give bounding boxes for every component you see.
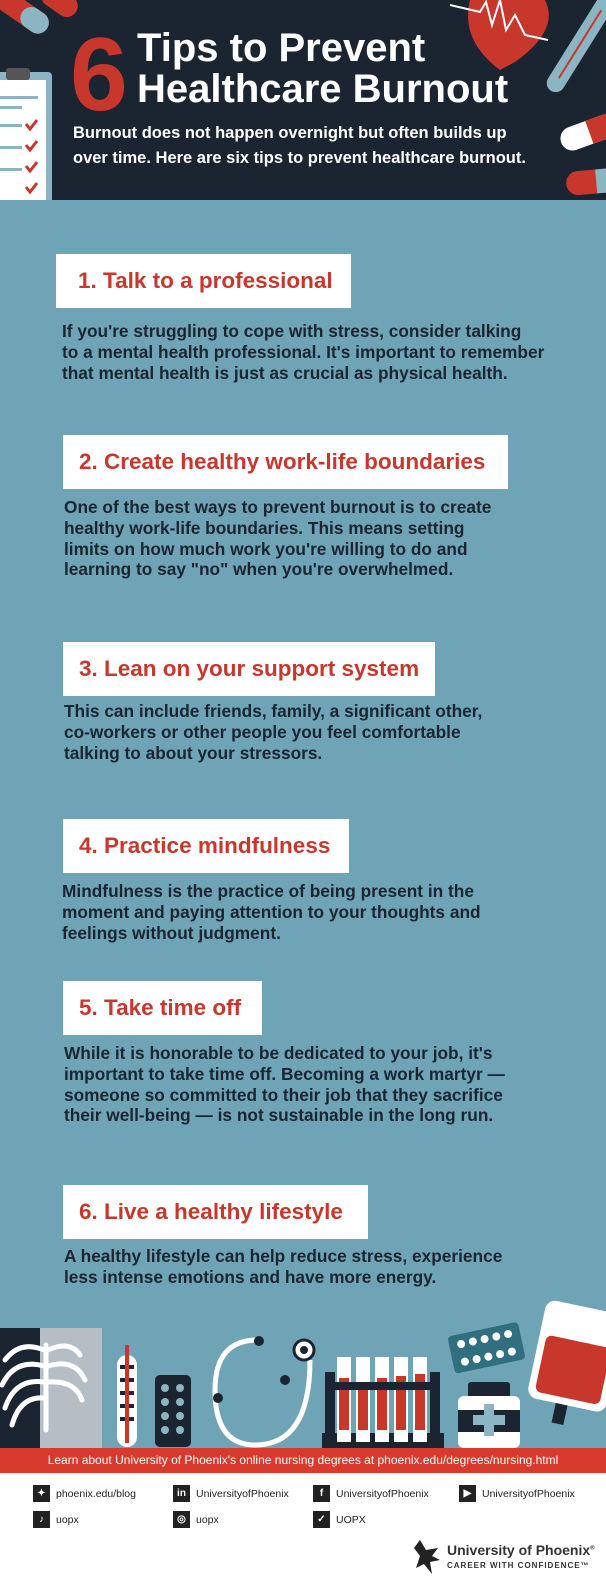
text 4: Mindfulness is the practice of being present in the xyxy=(62,881,474,901)
title number 6: 6 xyxy=(70,17,128,133)
heading 5 xyxy=(63,981,262,1035)
subtitle: over time. Here are six tips to prevent healthcare burnout. xyxy=(73,149,526,167)
text 1: that mental health is just as crucial as physical health. xyxy=(62,363,508,383)
title xyxy=(137,26,508,111)
heading 3: 3. Lean on your support system xyxy=(79,656,419,681)
heading 6: 6. Live a healthy lifestyle xyxy=(79,1199,343,1224)
heading 3 xyxy=(63,642,435,696)
tip 5 xyxy=(63,981,505,1125)
text 6 xyxy=(64,1246,502,1287)
social links: ✓ xyxy=(317,1514,326,1525)
text 2 xyxy=(64,497,491,579)
text 1: to a mental health professional. It's important to remember xyxy=(62,342,544,362)
social links xyxy=(33,1485,575,1528)
logo: CAREER WITH CONFIDENCE™ xyxy=(447,1561,590,1570)
text 5: While it is honorable to be dedicated to your job, it's xyxy=(64,1043,492,1063)
text 1 xyxy=(62,321,544,383)
heading 2: 2. Create healthy work-life boundaries xyxy=(79,449,485,474)
subtitle: Burnout does not happen overnight but often builds up xyxy=(73,124,507,142)
text 3 xyxy=(64,701,482,763)
main panel xyxy=(0,200,606,1473)
text 5: their well-being — is not sustainable in the long run. xyxy=(64,1105,493,1125)
text 2: One of the best ways to prevent burnout is to create xyxy=(64,497,491,517)
tip 6 xyxy=(63,1185,502,1287)
social links: UniversityofPhoenix xyxy=(196,1488,289,1500)
text 5 xyxy=(64,1043,505,1125)
social links: phoenix.edu/blog xyxy=(56,1488,136,1500)
heading 1 xyxy=(56,254,351,308)
tip 2 xyxy=(63,435,508,579)
text 2: limits on how much work you're willing to do and xyxy=(64,539,468,559)
link bar: Learn about University of Phoenix's online nursing degrees at phoenix.edu/degrees/nursing.html xyxy=(48,1453,558,1467)
social links: in xyxy=(177,1488,186,1499)
logo: University of Phoenix® xyxy=(447,1542,595,1558)
link bar xyxy=(0,1448,606,1473)
text 3: This can include friends, family, a significant other, xyxy=(64,701,482,721)
tip 4 xyxy=(62,819,481,943)
heading 4 xyxy=(63,819,349,873)
text 1: If you're struggling to cope with stress, consider talking xyxy=(62,321,521,341)
text 4 xyxy=(62,881,481,943)
tip 1 xyxy=(56,254,544,383)
logo xyxy=(414,1540,595,1574)
text 4: feelings without judgment. xyxy=(62,923,281,943)
heading 5: 5. Take time off xyxy=(79,995,241,1020)
text 2: healthy work-life boundaries. This means setting xyxy=(64,518,464,538)
social links: f xyxy=(320,1488,323,1499)
heading 6 xyxy=(63,1185,368,1239)
social links: UOPX xyxy=(336,1514,366,1526)
social links: UniversityofPhoenix xyxy=(482,1488,575,1500)
social links: uopx xyxy=(56,1514,79,1526)
heading 2 xyxy=(63,435,508,489)
text 5: important to take time off. Becoming a work martyr — xyxy=(64,1064,505,1084)
text 6: A healthy lifestyle can help reduce stress, experience xyxy=(64,1246,502,1266)
text 6: less intense emotions and have more energy. xyxy=(64,1267,436,1287)
social links: ✦ xyxy=(37,1488,46,1499)
text 5: someone so committed to their job that they sacrifice xyxy=(64,1085,503,1105)
text 2: learning to say "no" when you're overwhelmed. xyxy=(64,559,453,579)
text 3: co-workers or other people you feel comfortable xyxy=(64,722,461,742)
social links: uopx xyxy=(196,1514,219,1526)
social links: ▶ xyxy=(464,1488,471,1499)
subtitle xyxy=(73,124,526,167)
text 4: moment and paying attention to your thoughts and xyxy=(62,902,481,922)
text 3: talking to about your stressors. xyxy=(64,743,322,763)
social links: ♪ xyxy=(39,1514,44,1525)
icons: header decorations xyxy=(0,0,606,200)
illustration: medical items xyxy=(0,1300,606,1448)
header xyxy=(0,0,606,200)
tip 3 xyxy=(63,642,482,763)
social links: ◎ xyxy=(177,1514,186,1525)
heading 1: 1. Talk to a professional xyxy=(78,268,333,293)
title: Tips to Prevent xyxy=(137,26,425,70)
social links: UniversityofPhoenix xyxy=(336,1488,429,1500)
title: Healthcare Burnout xyxy=(137,67,508,111)
heading 4: 4. Practice mindfulness xyxy=(79,833,330,858)
